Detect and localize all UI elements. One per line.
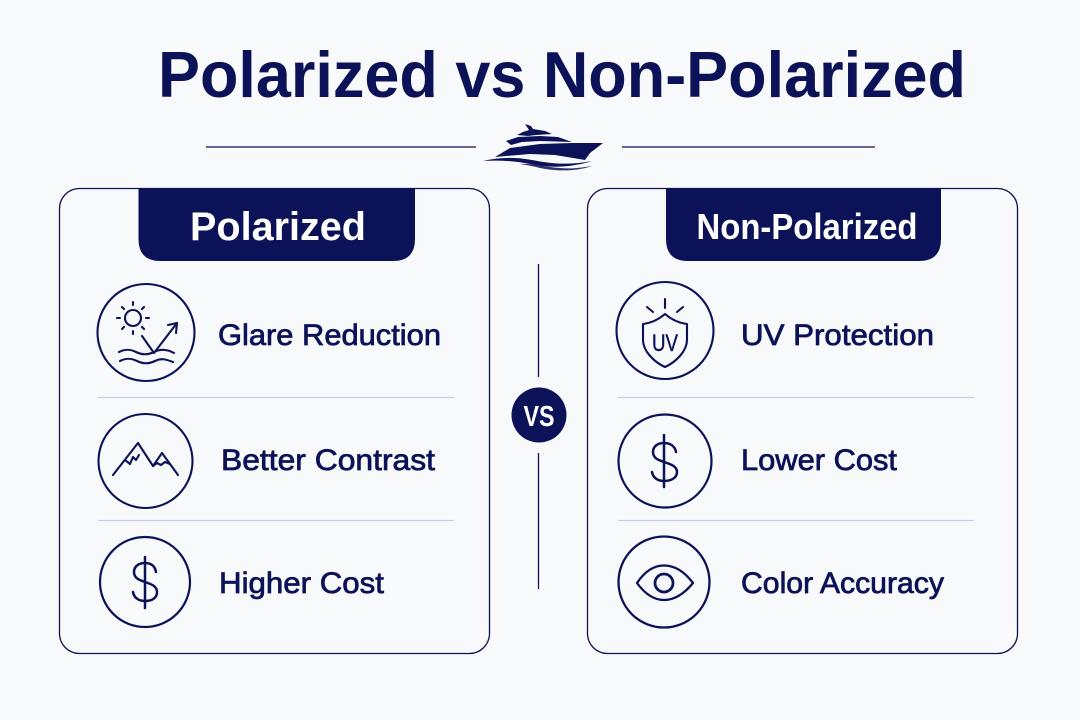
panel heading: Non-Polarized	[696, 206, 918, 247]
row divider	[618, 396, 974, 398]
title rule: right	[622, 146, 875, 148]
row divider	[98, 396, 454, 398]
icon: eye	[618, 536, 710, 628]
row divider	[98, 520, 454, 522]
panel heading tab	[666, 188, 941, 261]
title: Polarized vs Non-Polarized	[158, 38, 966, 111]
icon: sun glare on water	[98, 284, 194, 381]
label: higher cost: Higher Cost	[219, 567, 385, 600]
title rule: left	[206, 146, 476, 148]
panel: non-polarized	[588, 188, 1018, 654]
panel heading: Polarized	[190, 205, 366, 249]
icon: mountains	[98, 414, 192, 508]
icon: uv shield: UV	[652, 330, 678, 357]
label: lower cost: Lower Cost	[741, 444, 898, 477]
panel: polarized	[60, 188, 490, 654]
label: better contrast: Better Contrast	[221, 444, 436, 477]
icon: dollar	[100, 537, 190, 627]
label: glare reduction: Glare Reduction	[218, 319, 441, 352]
vs badge text: VS	[524, 401, 554, 433]
panel border	[588, 188, 1018, 654]
row divider	[618, 520, 974, 522]
icon: uv shield	[616, 282, 714, 379]
vs divider	[512, 264, 566, 589]
label: color accuracy: Color Accuracy	[741, 567, 944, 600]
icon: yacht	[483, 124, 603, 170]
label: uv protection: UV Protection	[741, 319, 934, 352]
icon: dollar	[618, 414, 712, 508]
panel heading tab	[138, 188, 415, 261]
vs badge circle	[512, 388, 566, 442]
divider line: top	[538, 264, 540, 377]
panel border	[60, 188, 490, 654]
divider line: bottom	[538, 453, 540, 589]
